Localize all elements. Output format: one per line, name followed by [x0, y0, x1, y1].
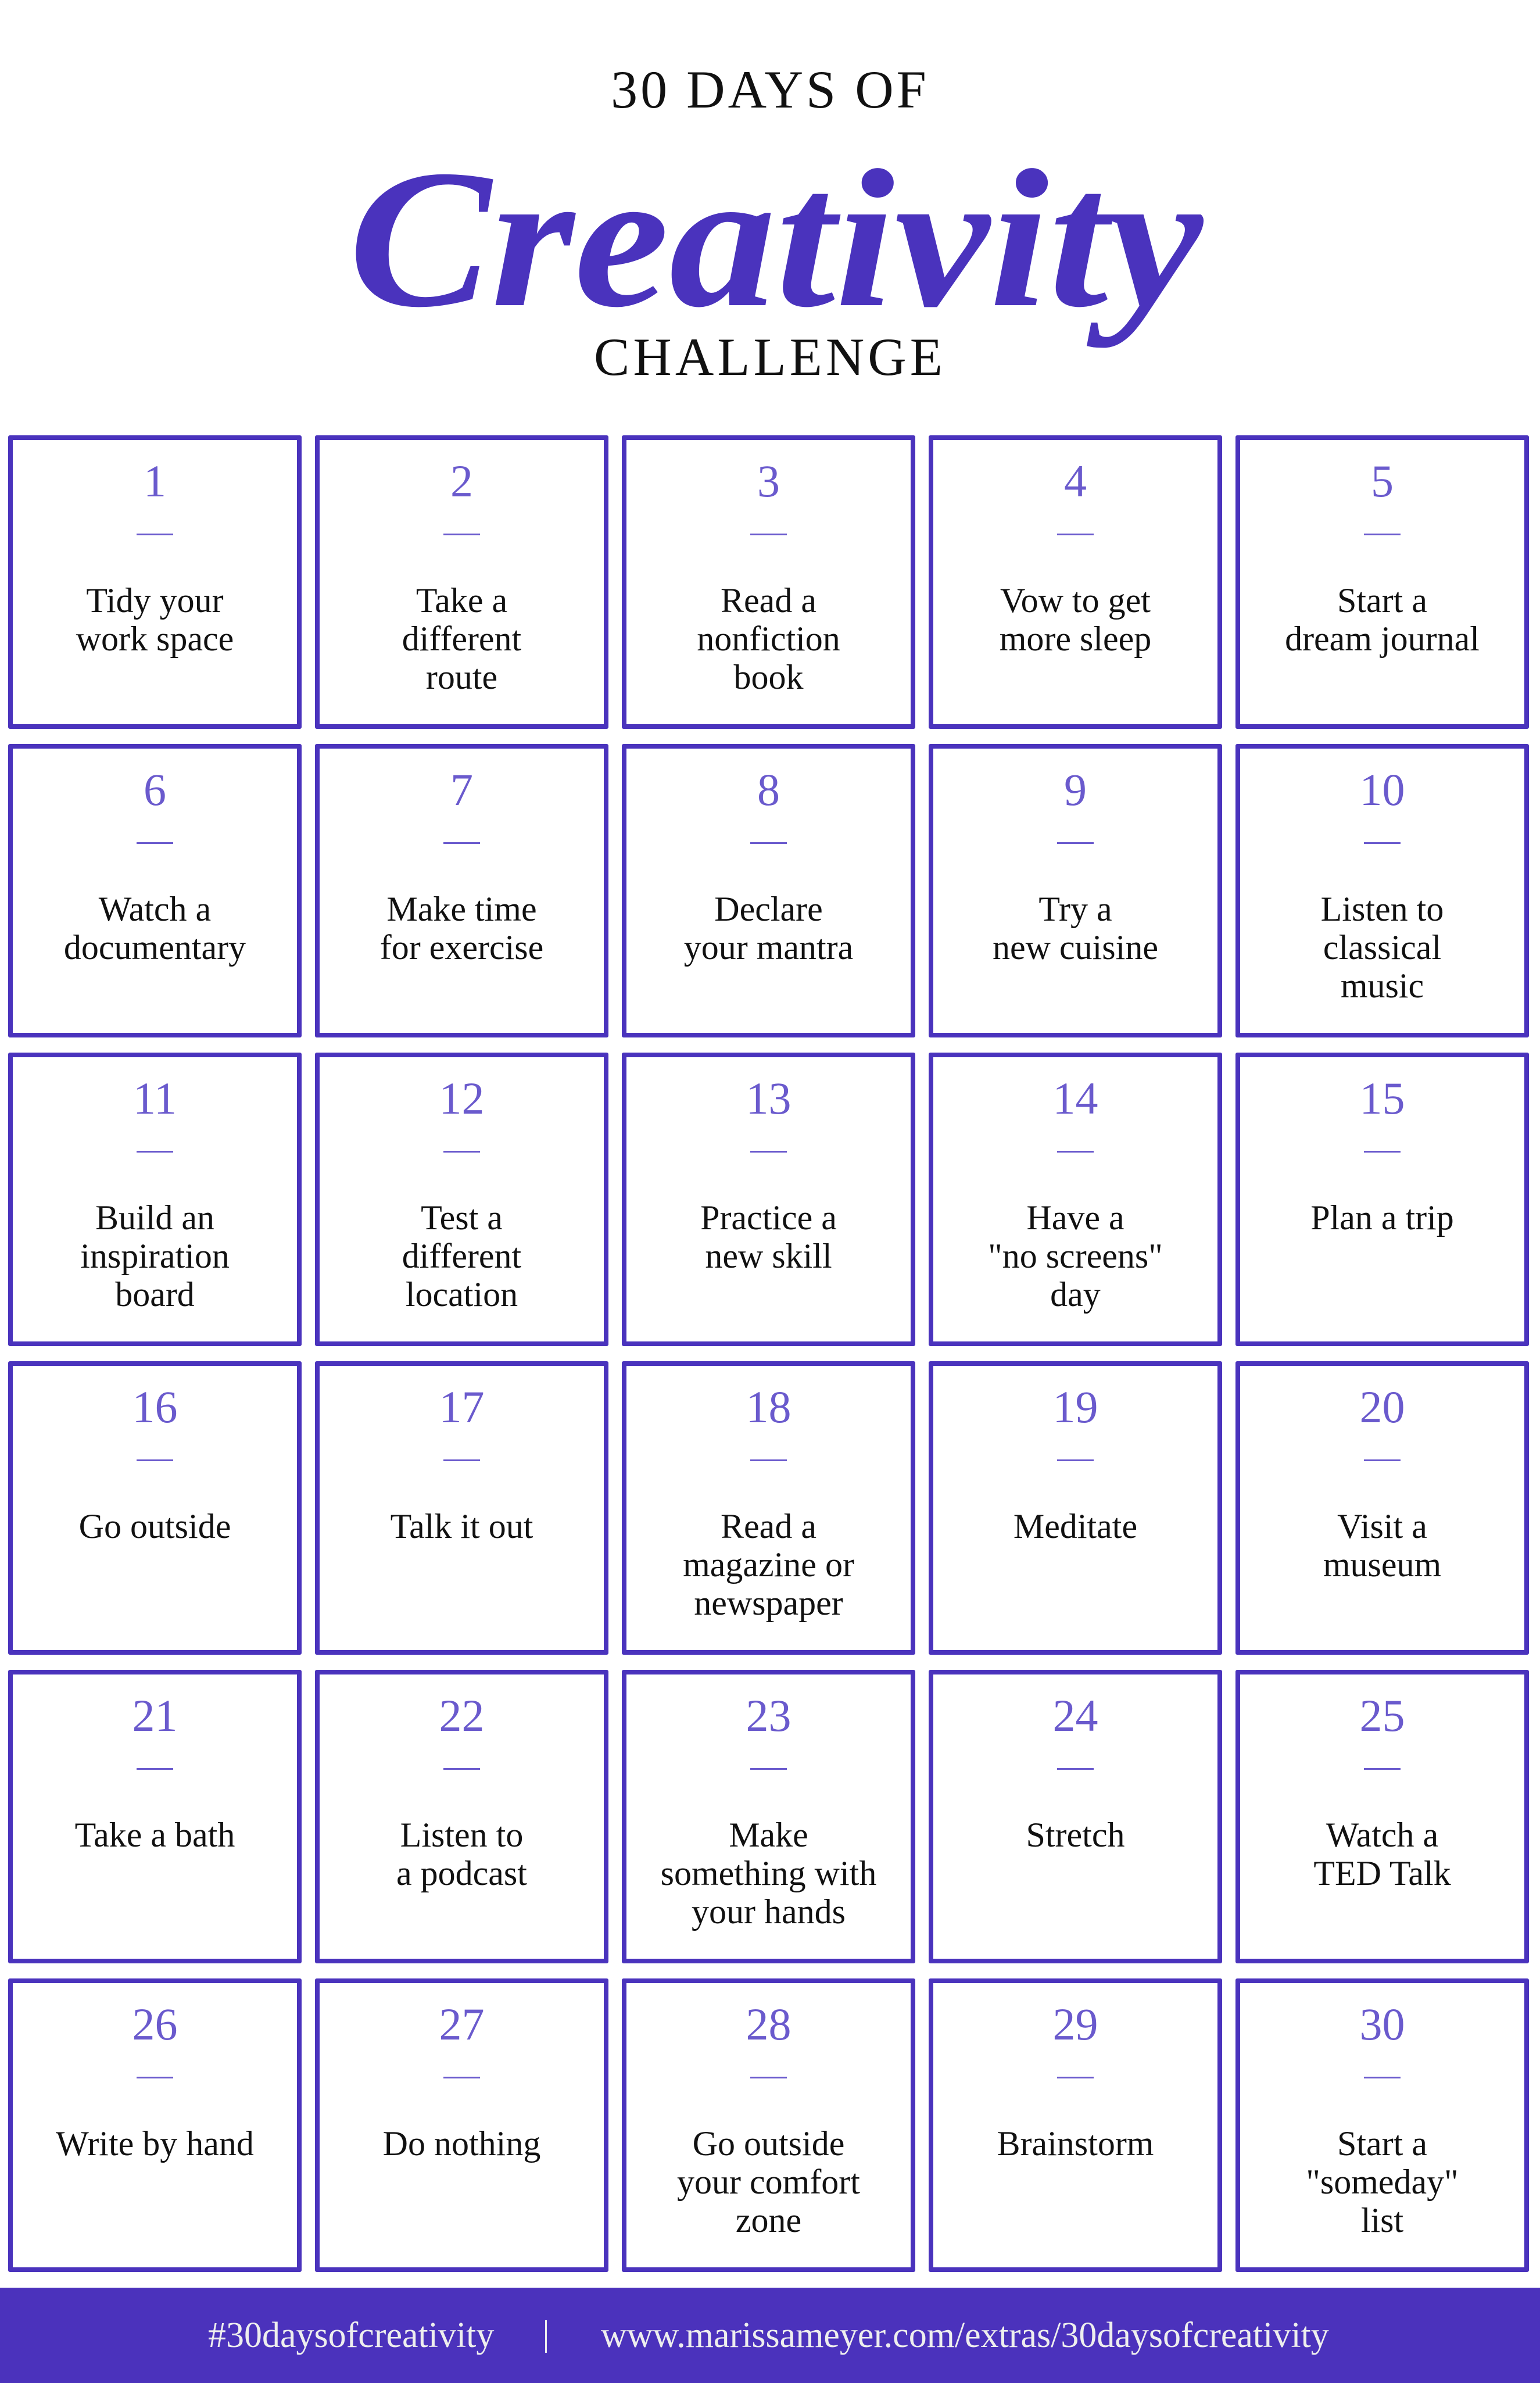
day 13: new skill: [705, 1237, 832, 1275]
title: Creativity script: Creativity: [349, 129, 1205, 348]
day 1: [8, 435, 302, 729]
day 11: inspiration: [80, 1237, 230, 1275]
day 29: [929, 1978, 1222, 2272]
day 14: day: [1050, 1275, 1101, 1314]
day 4: Vow to get: [1000, 581, 1151, 620]
day 8: Declare: [714, 890, 823, 928]
footer bar: [0, 2288, 1540, 2383]
day 12: different: [402, 1237, 521, 1275]
day 23: something with: [661, 1854, 876, 1892]
day 25: 25: [1360, 1690, 1405, 1741]
day 1: Tidy your: [86, 581, 224, 620]
day 15: Plan a trip: [1310, 1198, 1454, 1237]
day 29: 29: [1053, 1999, 1098, 2049]
day 19: Meditate: [1013, 1507, 1137, 1545]
title: challenge: CHALLENGE: [594, 327, 946, 387]
day 22: a podcast: [396, 1854, 527, 1892]
day 15: [1235, 1053, 1529, 1346]
day 7: Make time: [386, 890, 537, 928]
day 18: newspaper: [694, 1584, 843, 1622]
day 2: route: [426, 658, 497, 696]
day 7: for exercise: [380, 928, 543, 967]
day 28: 28: [746, 1999, 792, 2049]
day 9: 9: [1064, 764, 1087, 815]
day 2: [315, 435, 608, 729]
day 26: [8, 1978, 302, 2272]
day 29: Brainstorm: [997, 2124, 1154, 2163]
day 19: 19: [1053, 1382, 1098, 1432]
day 30: 30: [1360, 1999, 1405, 2049]
day 7: [315, 744, 608, 1037]
day 11: Build an: [95, 1198, 214, 1237]
day 25: Watch a: [1326, 1816, 1438, 1854]
day 20: [1235, 1361, 1529, 1655]
day 6: documentary: [64, 928, 246, 967]
day 5: dream journal: [1285, 620, 1480, 658]
day 16: [8, 1361, 302, 1655]
day 19: [929, 1361, 1222, 1655]
day 18: magazine or: [683, 1545, 854, 1584]
day 7: 7: [450, 764, 473, 815]
title: 30 days of: 30 DAYS OF: [611, 60, 929, 119]
day 28: zone: [736, 2201, 801, 2239]
day 14: 14: [1053, 1073, 1098, 1123]
day 28: [622, 1978, 915, 2272]
day 2: 2: [450, 456, 473, 506]
day 26: Write by hand: [56, 2124, 254, 2163]
day 10: Listen to: [1321, 890, 1444, 928]
day 11: 11: [133, 1073, 177, 1123]
day 5: 5: [1371, 456, 1394, 506]
day 1: work space: [76, 620, 234, 658]
day 21: [8, 1670, 302, 1963]
day 10: 10: [1360, 764, 1405, 815]
day 25: [1235, 1670, 1529, 1963]
day 9: Try a: [1038, 890, 1112, 928]
day 17: [315, 1361, 608, 1655]
day 11: board: [115, 1275, 195, 1314]
day 9: new cuisine: [993, 928, 1158, 967]
day 28: Go outside: [693, 2124, 844, 2163]
day 6: 6: [144, 764, 166, 815]
footer url: www.marissameyer.com/extras/30daysofcreativity: [601, 2316, 1329, 2355]
day 23: [622, 1670, 915, 1963]
day 5: Start a: [1337, 581, 1427, 620]
day 15: 15: [1360, 1073, 1405, 1123]
day 25: TED Talk: [1313, 1854, 1451, 1892]
day 30: "someday": [1306, 2163, 1459, 2201]
day 13: Practice a: [700, 1198, 837, 1237]
day 24: [929, 1670, 1222, 1963]
day 14: [929, 1053, 1222, 1346]
day 18: 18: [746, 1382, 792, 1432]
day 30: [1235, 1978, 1529, 2272]
day 2: different: [402, 620, 521, 658]
day 10: classical: [1323, 928, 1441, 967]
day 4: 4: [1064, 456, 1087, 506]
day 20: Visit a: [1337, 1507, 1427, 1545]
day 26: 26: [132, 1999, 178, 2049]
day 4: [929, 435, 1222, 729]
day 10: [1235, 744, 1529, 1037]
day 30: list: [1361, 2201, 1403, 2239]
day 4: more sleep: [1000, 620, 1151, 658]
day 30: Start a: [1337, 2124, 1427, 2163]
day 18: Read a: [721, 1507, 816, 1545]
day 6: [8, 744, 302, 1037]
day 23: your hands: [692, 1892, 846, 1931]
day 8: your mantra: [684, 928, 853, 967]
day 27: [315, 1978, 608, 2272]
day 22: Listen to: [400, 1816, 523, 1854]
day 20: museum: [1323, 1545, 1441, 1584]
day 8: [622, 744, 915, 1037]
day 3: Read a: [721, 581, 816, 620]
day 12: [315, 1053, 608, 1346]
day 14: "no screens": [988, 1237, 1163, 1275]
day 11: [8, 1053, 302, 1346]
day 3: nonfiction: [697, 620, 840, 658]
day 24: 24: [1053, 1690, 1098, 1741]
day 2: Take a: [416, 581, 507, 620]
day 17: 17: [439, 1382, 485, 1432]
day 10: music: [1341, 967, 1424, 1005]
day 5: [1235, 435, 1529, 729]
day 6: Watch a: [99, 890, 211, 928]
day 12: location: [406, 1275, 518, 1314]
day 9: [929, 744, 1222, 1037]
day 16: Go outside: [79, 1507, 231, 1545]
footer hashtag: #30daysofcreativity: [208, 2316, 494, 2355]
day 3: [622, 435, 915, 729]
day 28: your comfort: [677, 2163, 860, 2201]
day 27: 27: [439, 1999, 485, 2049]
day 27: Do nothing: [383, 2124, 540, 2163]
day 17: Talk it out: [391, 1507, 533, 1545]
day 22: 22: [439, 1690, 485, 1741]
day 3: 3: [757, 456, 780, 506]
day 13: [622, 1053, 915, 1346]
day 3: book: [733, 658, 803, 696]
day 1: 1: [144, 456, 166, 506]
day 23: Make: [729, 1816, 808, 1854]
day 8: 8: [757, 764, 780, 815]
day 20: 20: [1360, 1382, 1405, 1432]
day 18: [622, 1361, 915, 1655]
day 16: 16: [132, 1382, 178, 1432]
day 21: 21: [132, 1690, 178, 1741]
footer separator: [545, 2320, 547, 2353]
day 21: Take a bath: [75, 1816, 235, 1854]
day 23: 23: [746, 1690, 792, 1741]
day 14: Have a: [1026, 1198, 1124, 1237]
day 12: 12: [439, 1073, 485, 1123]
day 22: [315, 1670, 608, 1963]
day 12: Test a: [421, 1198, 503, 1237]
day 24: Stretch: [1026, 1816, 1124, 1854]
day 13: 13: [746, 1073, 792, 1123]
